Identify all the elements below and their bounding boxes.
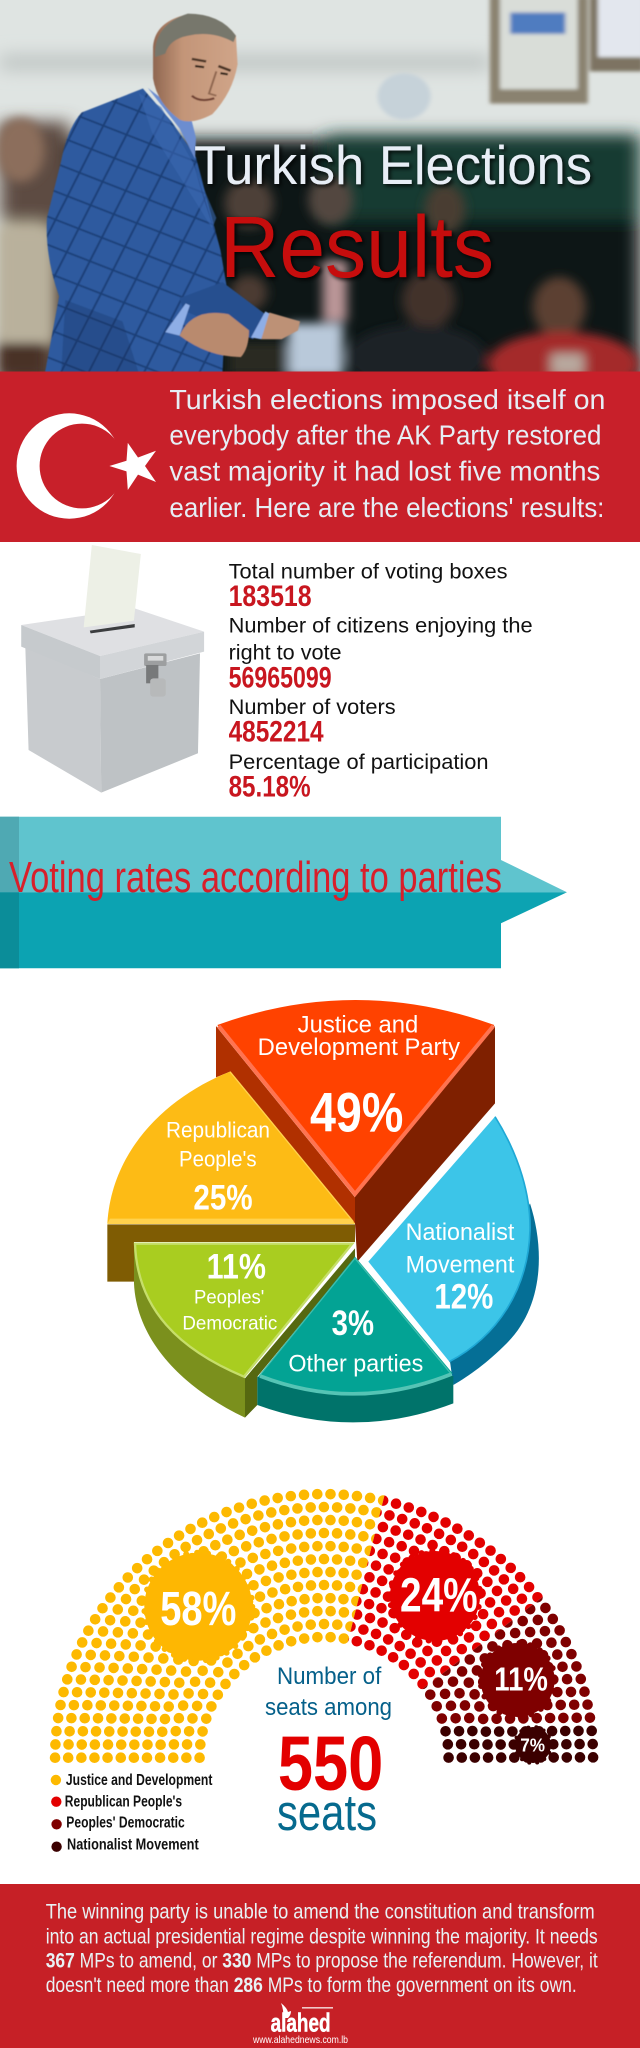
slice: Peoples' Democratic 11%: Peoples' (194, 1287, 264, 1308)
badge: 58%: 58% (160, 1583, 236, 1636)
slice: Republican People's 25% (107, 1072, 355, 1282)
slice: Other parties 3% (257, 1257, 453, 1422)
text block: number of seats (265, 1663, 392, 1841)
text block: conclusion (46, 1900, 598, 1997)
legend: parties: Justice and Development (66, 1772, 213, 1789)
chart: hemicycle of 550 seats (51, 1494, 593, 1853)
text block: number of seats: seats (277, 1784, 377, 1841)
slice: Nationalist Movement 12%: Movement (406, 1252, 515, 1279)
legend: parties: Peoples' Democratic (66, 1815, 185, 1832)
stat: total voting boxes: Total number of voting boxes (229, 560, 508, 583)
number: 4852214: 4852214 (229, 716, 324, 749)
slice: Republican People's 25%: Republican (166, 1118, 270, 1143)
seats: Republican People's (348, 1496, 543, 1690)
text block: number of seats: seats among (265, 1694, 392, 1721)
logo: alahed (252, 2003, 348, 2046)
icon: crescent and star (17, 413, 156, 519)
number: 183518: 183518 (229, 580, 312, 613)
banner: voting rates heading (0, 817, 567, 968)
slice: Justice and Development Party 49%: Development Party (258, 1034, 460, 1061)
text block: intro: Turkish elections imposed itself on (169, 384, 605, 415)
slice: Nationalist Movement 12%: 12% (434, 1277, 493, 1316)
seats: Nationalist Movement (440, 1724, 598, 1763)
slice: Republican People's 25%: People's (179, 1147, 257, 1172)
logo: alahed: alahed (271, 2008, 331, 2038)
badge: 7% (515, 1727, 551, 1763)
stat: voters: Number of voters (229, 696, 396, 719)
legend: parties (51, 1772, 213, 1853)
panel: red intro band (0, 372, 640, 542)
stat: citizens with right to vote: Number of citizens enjoying the (229, 615, 533, 638)
heading: Turkish Elections: Turkish Elections (194, 134, 592, 196)
seats: Justice and Development (50, 1488, 384, 1763)
photo: blurred polling room background (0, 0, 640, 396)
text block: election statistics (229, 560, 533, 804)
chart: 3D pie of voting rates (107, 1000, 539, 1422)
slice: Other parties 3%: Other parties (288, 1351, 423, 1378)
slice: Peoples' Democratic 11%: 11% (207, 1247, 266, 1286)
legend: parties: Republican People's (65, 1794, 182, 1811)
icon: ballot box (21, 545, 204, 793)
panel: footer (0, 1884, 640, 2048)
text block: intro (169, 384, 605, 523)
badge: 7%: 7% (520, 1736, 545, 1756)
text block: intro: vast majority it had lost five months (169, 455, 600, 486)
slice: Nationalist Movement 12% (368, 1117, 539, 1385)
slice: Justice and Development Party 49%: 49% (310, 1081, 403, 1144)
photo: man in blue suit (45, 14, 300, 373)
slice: Nationalist Movement 12%: Nationalist (406, 1219, 515, 1246)
slice: Peoples' Democratic 11% (134, 1243, 355, 1418)
number: 56965099: 56965099 (229, 661, 332, 694)
slice: Republican People's 25%: 25% (193, 1178, 253, 1217)
legend: parties: Nationalist Movement (67, 1836, 199, 1853)
text block: conclusion: doesn't need more than 286 MPs to form the government on its own. (46, 1974, 577, 1997)
heading: Results: Results (220, 199, 494, 296)
stat: citizens line two: right to vote (229, 641, 342, 664)
badge: 11% (481, 1643, 555, 1717)
badge: 58% (144, 1553, 252, 1661)
slice: Peoples' Democratic 11%: Democratic (182, 1313, 278, 1334)
seats: Peoples' Democratic (422, 1596, 596, 1724)
text block: intro: everybody after the AK Party restored (169, 420, 601, 451)
text block: number of seats: 550 (278, 1721, 383, 1807)
slice: Justice and Development Party 49% (216, 1000, 495, 1262)
stat: participation: Percentage of participation (229, 751, 489, 774)
badge: 24% (390, 1551, 480, 1641)
logo: alahed: www.alahednews.com.lb (252, 2034, 348, 2046)
slice: Justice and Development Party 49%: Justice and (298, 1012, 418, 1039)
number: 85.18%: 85.18% (229, 771, 311, 804)
text block: intro: earlier. Here are the elections' results: (169, 492, 604, 523)
badge: 24%: 24% (400, 1570, 478, 1623)
badge: 11%: 11% (494, 1661, 548, 1698)
panel: hero photo header (0, 0, 640, 396)
heading: Voting rates according to parties: Voting rates according to parties (9, 853, 502, 902)
slice: Other parties 3%: 3% (332, 1304, 374, 1343)
text block: number of seats: Number of (277, 1663, 382, 1690)
